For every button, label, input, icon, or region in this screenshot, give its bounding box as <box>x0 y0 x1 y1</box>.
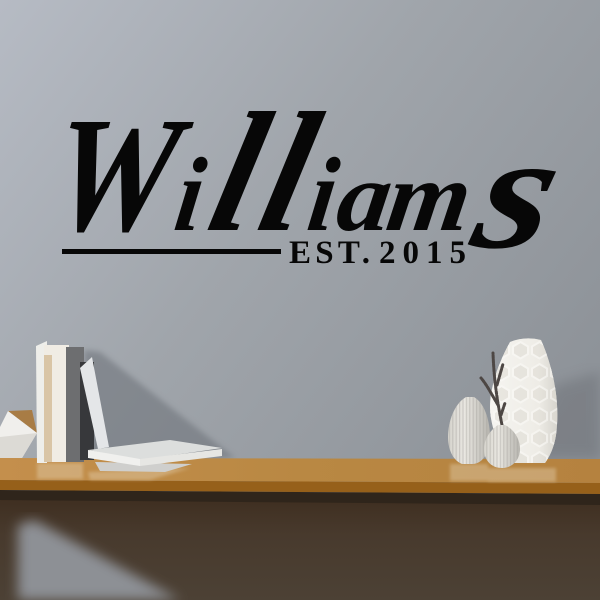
wordmark: Williams: i <box>169 136 212 253</box>
vase: small left <box>448 397 490 464</box>
wordmark: Williams: i <box>302 136 345 253</box>
underline rule <box>62 249 281 254</box>
books: flat stack <box>88 440 222 472</box>
icon: geometric object <box>0 410 37 458</box>
wordmark: Williams <box>41 77 580 283</box>
wordmark: Williams: l <box>195 77 285 267</box>
shadow: books on wall <box>84 350 235 458</box>
wordmark: Williams: a <box>331 142 399 252</box>
wordmark: Williams: W <box>41 84 199 266</box>
text: EST. 2015: EST. <box>289 235 370 271</box>
shelf <box>0 458 600 505</box>
shelf underside <box>0 490 600 505</box>
shadow: vases on wall <box>520 372 600 458</box>
wordmark: Williams: l <box>245 77 335 267</box>
grey wall patch under shelf <box>18 520 180 600</box>
book: leaning <box>80 357 109 449</box>
shelf top surface <box>0 458 600 483</box>
wordmark: Williams: m <box>381 142 479 252</box>
reflections on shelf <box>37 463 556 482</box>
icon: dried twigs <box>481 353 505 425</box>
vase: small right <box>484 425 520 468</box>
vase: large honeycomb <box>488 336 560 466</box>
lower cabinet under shelf <box>0 500 600 600</box>
text: EST. 2015: 2015 <box>379 235 466 271</box>
books: upright <box>36 341 94 463</box>
shelf front edge <box>0 480 600 494</box>
wordmark: Williams: s <box>458 101 580 283</box>
